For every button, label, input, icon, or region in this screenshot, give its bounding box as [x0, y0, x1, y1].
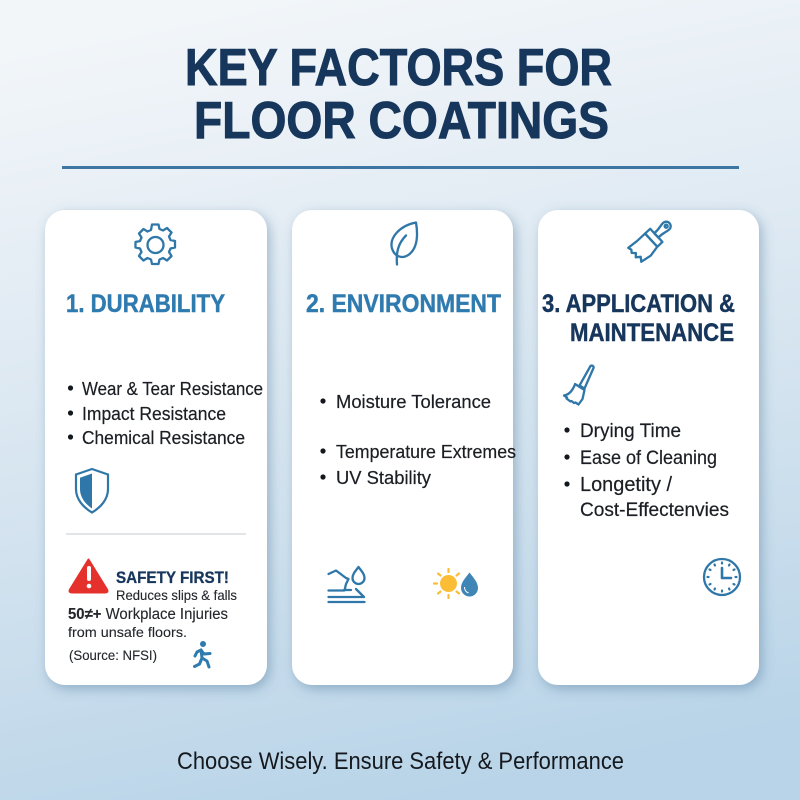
heading: environment: 2. ENVIRONMENT — [306, 290, 501, 318]
footer tagline: Choose Wisely. Ensure Safety & Performance — [177, 748, 624, 775]
application list: Longetity / — [580, 474, 672, 496]
environment list: Temperature Extremes — [336, 442, 516, 462]
environment list: UV Stability — [336, 468, 431, 488]
heading: application and maintenance: MAINTENANCE — [570, 319, 734, 347]
environment list — [320, 392, 516, 488]
safety text: Reduces slips & falls — [116, 587, 237, 603]
durability list — [68, 379, 263, 448]
icon: clock — [704, 559, 740, 595]
title — [185, 39, 612, 150]
panel: environment — [292, 210, 516, 685]
durability list: Chemical Resistance — [82, 428, 245, 448]
icon: shield — [76, 469, 108, 512]
safety heading: SAFETY FIRST! — [116, 568, 229, 587]
application list: Ease of Cleaning — [580, 448, 717, 469]
application list: Drying Time — [580, 420, 681, 442]
icon: running person — [194, 641, 210, 667]
application list — [564, 420, 729, 521]
panel: durability — [45, 210, 267, 685]
heading: application and maintenance: 3. APPLICATION & — [542, 290, 735, 318]
callout: safety first — [68, 560, 237, 667]
heading: durability: 1. DURABILITY — [66, 290, 225, 318]
durability list: Wear & Tear Resistance — [82, 379, 263, 399]
icon: sun and water drop — [434, 569, 478, 598]
application list: Cost-Effectenvies — [580, 500, 729, 521]
environment list: Moisture Tolerance — [336, 392, 491, 412]
icon: leaf — [392, 222, 417, 264]
durability list: Impact Resistance — [82, 404, 226, 424]
icon: broom — [564, 366, 594, 404]
safety text: 50≠+ Workplace Injuries — [68, 606, 228, 623]
divider — [66, 533, 246, 535]
safety text: from unsafe floors. — [68, 624, 187, 640]
safety text: (Source: NFSI) — [69, 647, 157, 663]
icon: paint brush — [628, 216, 677, 264]
heading: application and maintenance — [542, 290, 735, 347]
panel: application and maintenance — [538, 210, 759, 685]
icon: warning triangle — [70, 560, 107, 592]
icon: floor and water drop — [328, 567, 364, 602]
title: KEY FACTORS FOR — [185, 39, 612, 97]
title rule — [62, 166, 739, 169]
title: FLOOR COATINGS — [194, 92, 609, 150]
safety text — [68, 587, 237, 663]
icon: gear — [136, 224, 175, 264]
